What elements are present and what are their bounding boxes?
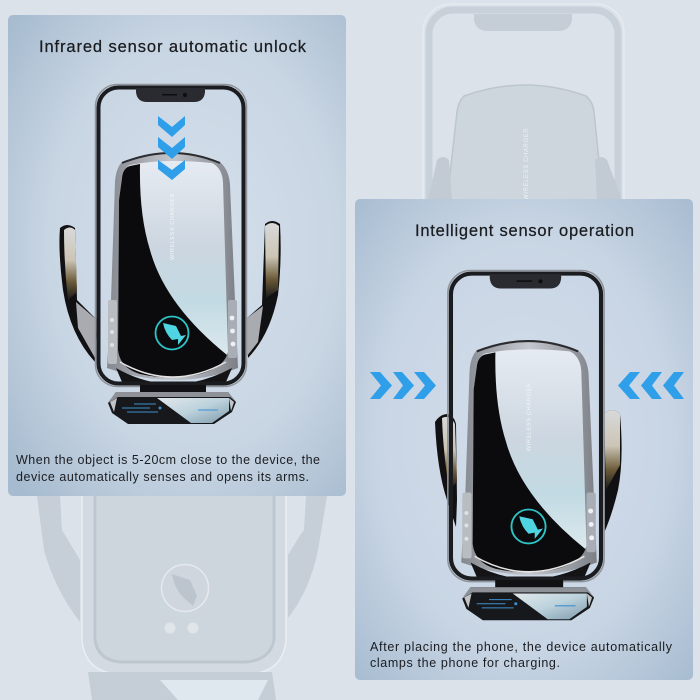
- arrows: pointing right: [370, 372, 436, 399]
- left clamp arm: [59, 225, 97, 362]
- device holder: [461, 340, 597, 579]
- description: After placing the phone, the device automatically: [370, 640, 673, 654]
- phone outline: [448, 271, 604, 582]
- panel background: [355, 199, 693, 680]
- phone outline: [96, 84, 246, 386]
- device holder: [107, 152, 238, 384]
- arrows: pointing left: [618, 372, 684, 399]
- charging base: [462, 580, 594, 620]
- ghost device: top right: [423, 4, 624, 304]
- charging base: [108, 385, 236, 424]
- left clamp arm: [435, 414, 457, 527]
- right clamp arm: [604, 410, 622, 533]
- panel background: [8, 15, 346, 496]
- description: clamps the phone for charging.: [370, 656, 560, 670]
- right clamp arm: [247, 221, 281, 358]
- arrows: pointing down: [158, 116, 185, 180]
- panel: infrared sensor automatic unlock: [8, 15, 346, 496]
- ghost device: bottom left: [37, 490, 327, 700]
- heading: Intelligent sensor operation: [415, 222, 634, 240]
- description: When the object is 5-20cm close to the device, the: [16, 453, 320, 467]
- ghost device: top right: WIRELESS CHARGER: [524, 128, 530, 200]
- description: device automatically senses and opens its arms.: [16, 470, 309, 484]
- panel: intelligent sensor operation: [355, 199, 693, 680]
- heading: Infrared sensor automatic unlock: [39, 38, 307, 56]
